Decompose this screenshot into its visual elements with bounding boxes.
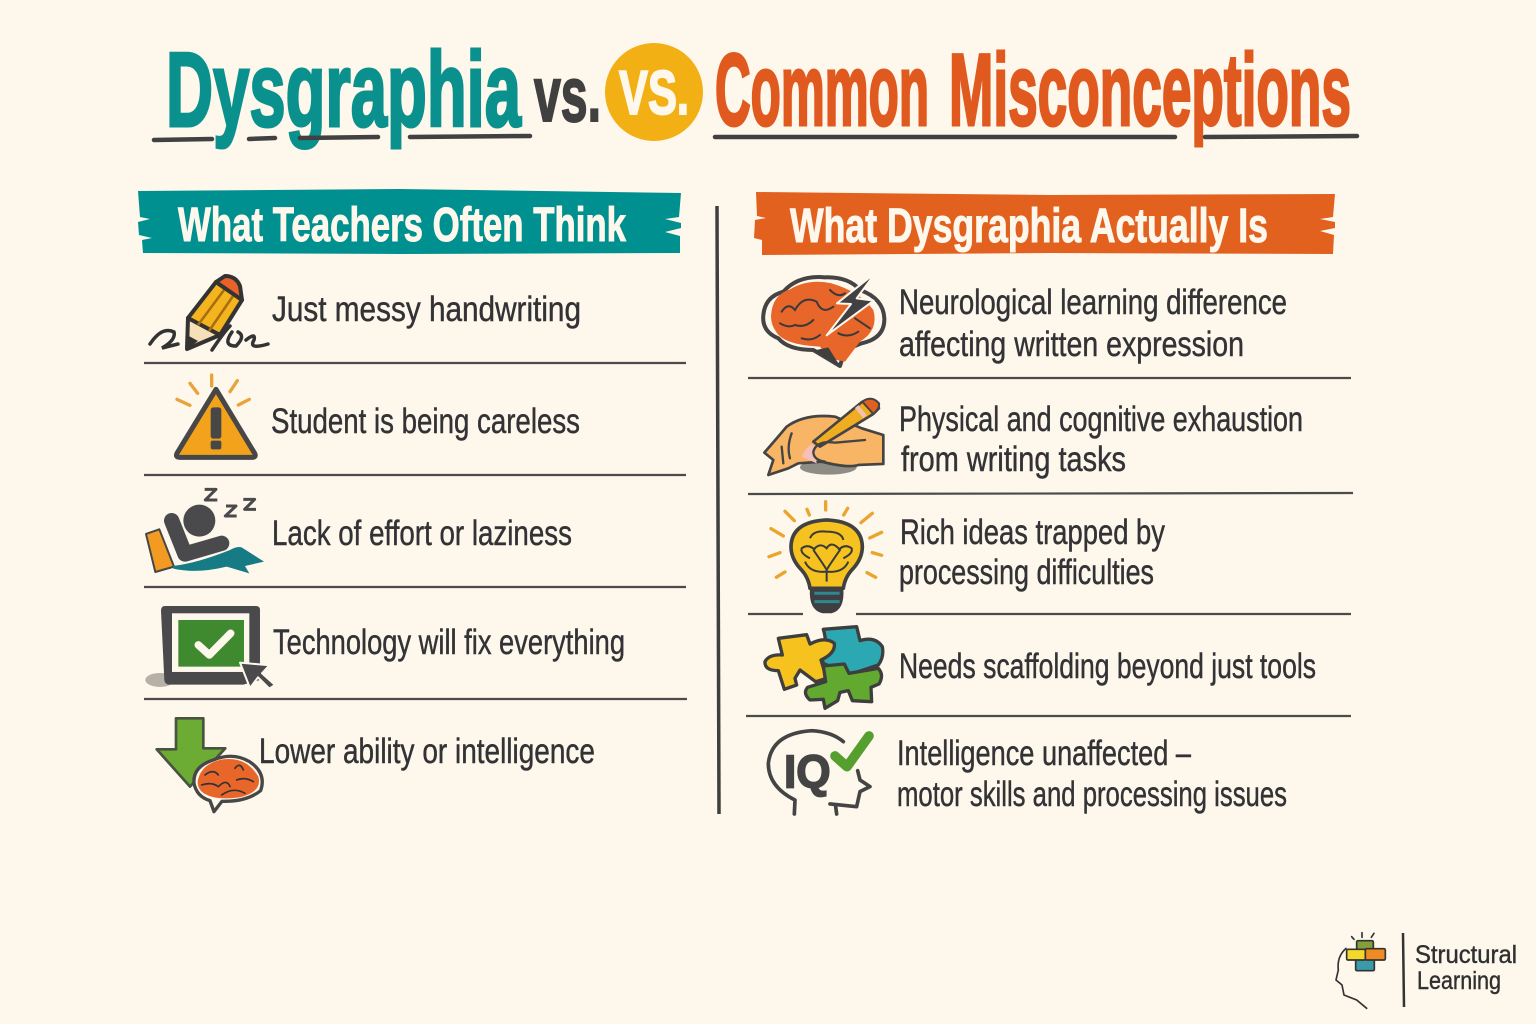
item: lower ability xyxy=(157,718,595,812)
banner: what teachers often think: What Teachers Often Think xyxy=(178,199,626,252)
text xyxy=(899,283,1287,364)
item: needs scaffolding xyxy=(765,627,1316,708)
text: Student is being careless xyxy=(271,402,580,441)
text: Physical and cognitive exhaustion xyxy=(899,400,1303,439)
text: Neurological learning difference xyxy=(899,283,1287,322)
banner: what teachers often think xyxy=(138,189,681,254)
item: student is being careless xyxy=(176,375,580,457)
text: Just messy handwriting xyxy=(272,290,581,329)
icon: head with blocks xyxy=(1336,933,1385,1008)
item: rich ideas xyxy=(769,502,1165,613)
panel: what dysgraphia actually is xyxy=(746,192,1353,814)
logo: structural learning xyxy=(1336,933,1517,1008)
text: Technology will fix everything xyxy=(273,623,625,662)
icon: brain with lightning xyxy=(763,273,884,366)
title: VS. xyxy=(619,59,689,128)
icon: hand with pencil xyxy=(764,399,883,475)
text: affecting written expression xyxy=(899,325,1244,364)
logo: structural learning: Structural xyxy=(1415,941,1517,969)
item: technology will fix everything xyxy=(145,606,625,689)
text xyxy=(897,734,1287,814)
icon: warning triangle xyxy=(176,375,255,457)
text xyxy=(899,513,1165,592)
text: Needs scaffolding beyond just tools xyxy=(899,647,1316,686)
icon: IQ head with check xyxy=(768,731,870,814)
icon: down arrow and brain xyxy=(157,718,262,812)
panel: what teachers often think xyxy=(138,189,687,812)
title xyxy=(154,31,1357,149)
text: Lack of effort or laziness xyxy=(272,514,572,553)
icon: sleeping figure xyxy=(146,489,264,573)
text xyxy=(899,400,1303,479)
item: lack of effort xyxy=(146,489,572,573)
title: Dysgraphia xyxy=(166,31,522,149)
icon: light bulb with brain xyxy=(769,502,882,613)
banner: what dysgraphia actually is: What Dysgraphia Actually Is xyxy=(790,200,1268,253)
icon: screen with check xyxy=(145,606,275,689)
text: motor skills and processing issues xyxy=(897,775,1287,814)
icon: puzzle pieces xyxy=(765,627,883,708)
icon: IQ head with check: IQ xyxy=(784,745,831,797)
center divider xyxy=(717,206,719,814)
text: from writing tasks xyxy=(901,440,1126,479)
item: neurological xyxy=(763,273,1287,366)
item: intelligence unaffected xyxy=(768,731,1287,814)
text: processing difficulties xyxy=(899,553,1154,592)
text: Intelligence unaffected – xyxy=(897,734,1191,773)
title: vs. xyxy=(534,50,601,138)
item: physical exhaustion xyxy=(764,399,1303,479)
banner: what dysgraphia actually is xyxy=(754,192,1335,255)
item: just messy handwriting xyxy=(150,276,581,350)
icon: pencil with scribble xyxy=(150,276,268,350)
text: Rich ideas trapped by xyxy=(900,513,1165,552)
title: Common xyxy=(715,33,929,147)
logo: structural learning: Learning xyxy=(1417,967,1501,995)
text: Lower ability or intelligence xyxy=(259,732,595,771)
